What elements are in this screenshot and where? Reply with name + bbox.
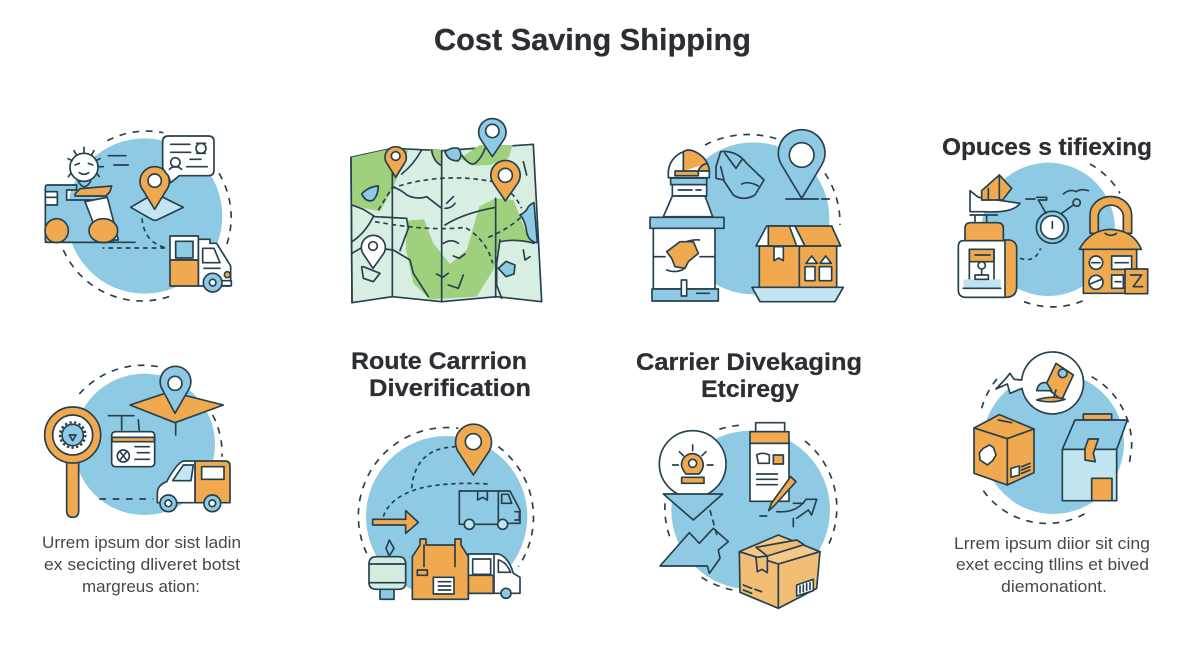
- blue open box: [1062, 414, 1127, 501]
- map sheet: [351, 144, 542, 303]
- vehicle body: [45, 185, 135, 243]
- blue circle background: [74, 374, 215, 515]
- delivery truck: [170, 236, 231, 292]
- inspection bubble: [996, 352, 1084, 414]
- dashed ring: [358, 428, 533, 567]
- heading: options: Opuces s tifiexing: [942, 134, 1152, 161]
- location pin on diamond: [131, 167, 183, 220]
- blue circle background: [983, 373, 1124, 514]
- dashed routes: [383, 447, 488, 517]
- speech bubble: [163, 136, 214, 183]
- dashed routes: [375, 178, 523, 263]
- icon: idea, checklist, arrows and box: [659, 423, 837, 608]
- orange pin small: [385, 147, 406, 177]
- white delivery van: [468, 554, 520, 598]
- icon: device, timer and padlock: [958, 163, 1148, 307]
- dashed path: [1020, 248, 1041, 260]
- blue circle background: [671, 431, 830, 589]
- magnifier: [45, 407, 101, 517]
- pencil: [769, 477, 796, 511]
- orange arrow: [373, 511, 418, 533]
- icon: folded route map with pins: [351, 119, 542, 303]
- dashed arrow: [760, 499, 817, 527]
- jagged arrow: [660, 528, 728, 573]
- map roads and folds: [351, 148, 534, 303]
- bottle: [650, 150, 724, 301]
- dashed road: [99, 496, 153, 501]
- icon: bottle, location pin and parcel box: [650, 130, 843, 302]
- water jug: [369, 540, 406, 599]
- white pin: [361, 235, 385, 268]
- outline van: [459, 491, 520, 529]
- icon: person, location pin and delivery truck: [45, 131, 231, 301]
- icon: route, vans and parcel: [358, 424, 533, 599]
- light bulb circle: [659, 431, 726, 497]
- heading: carrier packaging strategy: Etciregy: [701, 376, 800, 403]
- checklist: [750, 423, 789, 501]
- blue pin: [479, 119, 506, 157]
- blue circle background: [677, 142, 829, 294]
- heading: route carrier diversification: Route Carrrion: [351, 348, 527, 375]
- text block: left description: ex secicting dliveret botst: [44, 556, 240, 574]
- open parcel box: [752, 226, 843, 302]
- dashed connector: [710, 510, 717, 537]
- leaf shape: [716, 151, 764, 198]
- icon: boxes and inspection bubble: [974, 352, 1132, 523]
- green land areas: [352, 145, 534, 299]
- blue circle background: [366, 436, 527, 597]
- text block: right description: diemonationt.: [1001, 578, 1107, 596]
- blue circle background: [982, 163, 1115, 296]
- paper boat: [970, 175, 1020, 212]
- text block: left description: Urrem ipsum dor sist ladin: [42, 534, 241, 552]
- orange pin large: [491, 160, 520, 201]
- delivery van: [157, 461, 230, 512]
- dashed ring: [982, 377, 1132, 523]
- dashed ring: [705, 134, 840, 225]
- blue circle background: [67, 138, 222, 294]
- water bodies: [362, 148, 537, 277]
- downward triangle: [663, 494, 723, 520]
- device jar: [958, 215, 1017, 297]
- title: Cost Saving Shipping: [434, 22, 751, 57]
- orange envelope and pin: [130, 366, 223, 435]
- icon: magnifier, badge and van: [45, 365, 230, 517]
- stopwatch: [1026, 190, 1088, 243]
- sun face: [68, 147, 128, 187]
- dashed ring: [63, 131, 231, 301]
- text block: right description: exet eccing tllins et bived: [956, 556, 1149, 574]
- dashed ring: [1024, 164, 1120, 307]
- text block: right description: Lrrem ipsum diior sit cing: [954, 535, 1150, 553]
- orange box: [974, 415, 1034, 485]
- dashed ring: [665, 425, 837, 591]
- dashed route: [103, 218, 167, 248]
- text block: left description: margreus ation:: [82, 578, 200, 596]
- parcel: [412, 539, 468, 599]
- location pin outline: [778, 130, 829, 199]
- heading: carrier packaging strategy: Carrier Divekaging: [636, 349, 862, 376]
- dashed ring: [79, 365, 222, 457]
- location pin: [455, 424, 491, 475]
- id badge: [108, 416, 155, 467]
- cardboard box: [739, 535, 820, 608]
- padlock: [1079, 197, 1148, 294]
- heading: route carrier diversification: Diverification: [369, 375, 531, 402]
